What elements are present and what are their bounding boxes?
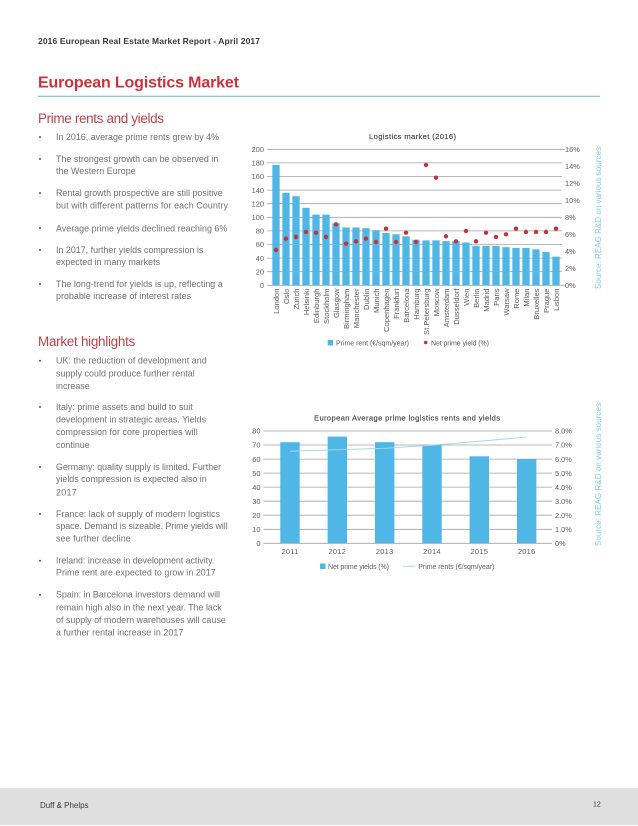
chart title: Logistics market (2016) bbox=[369, 132, 456, 141]
city labels: Madrid bbox=[482, 288, 491, 312]
city labels: Warsaw bbox=[502, 288, 511, 316]
bullet list: prime rents and yields: Average prime yields declined reaching 6% bbox=[56, 223, 227, 233]
bullet list: market highlights: of supply of modern warehouses will cause bbox=[56, 615, 226, 625]
dots: net prime yield bbox=[274, 163, 558, 252]
city labels: Dublin bbox=[362, 288, 371, 310]
right axis labels bbox=[555, 427, 572, 548]
chart legend: Prime rent (€/sqm/year) bbox=[336, 340, 409, 347]
right axis labels: 12% bbox=[565, 179, 580, 188]
city labels: Munich bbox=[372, 288, 381, 313]
bullet list: market highlights: supply could produce further rental bbox=[56, 368, 195, 378]
bullet list: market highlights: increase bbox=[56, 381, 90, 391]
left axis labels: 20 bbox=[256, 267, 264, 276]
bullet list: market highlights: space. Demand is sizeable. Prime yields will bbox=[56, 521, 228, 531]
right axis labels: 4.0% bbox=[555, 483, 572, 492]
bullet list: market highlights: compression for core properties will bbox=[56, 427, 198, 437]
bullet list: market highlights: Germany: quality supply is limited. Further bbox=[56, 462, 221, 472]
city labels: Wien bbox=[462, 288, 471, 306]
left axis labels: 30 bbox=[252, 497, 260, 506]
report header line: 2016 European Real Estate Market Report - April 2017 bbox=[38, 36, 260, 46]
source note: chart 2: Source: REAG R&D on various sources bbox=[594, 403, 603, 546]
city labels: Dusseldorf bbox=[452, 288, 461, 325]
right axis labels: 8.0% bbox=[555, 427, 572, 436]
city labels: Manchester bbox=[352, 288, 361, 328]
city labels: Oslo bbox=[282, 288, 291, 304]
year labels: 2016 bbox=[518, 547, 536, 556]
bars: net prime yields bbox=[280, 437, 536, 543]
bullet list: prime rents and yields: In 2016, average prime rents grew by 4% bbox=[56, 132, 219, 142]
city labels: Amsterdam bbox=[442, 288, 451, 327]
city labels: Edinburgh bbox=[312, 288, 321, 323]
bullet list: market highlights: Ireland: increase in development activity. bbox=[56, 556, 214, 566]
bullet list: market highlights: France: lack of supply of modern logistics bbox=[56, 509, 221, 519]
bullet list: market highlights: UK: the reduction of development and bbox=[56, 356, 207, 366]
bullet list: prime rents and yields: the Western Europe bbox=[56, 166, 136, 176]
left axis labels: 140 bbox=[252, 186, 264, 195]
chart legend bbox=[328, 340, 489, 347]
left axis labels: 100 bbox=[252, 213, 264, 222]
city labels: Zurich bbox=[292, 288, 301, 310]
left axis labels bbox=[252, 427, 260, 548]
right axis labels: 14% bbox=[565, 162, 580, 171]
chart legend: Net prime yields (%) bbox=[328, 564, 389, 571]
city labels: Prague bbox=[542, 288, 551, 313]
year labels: 2011 bbox=[281, 547, 299, 556]
bullet list: market highlights: 2017 bbox=[56, 488, 77, 498]
right axis labels bbox=[565, 145, 580, 290]
right axis labels: 6.0% bbox=[555, 455, 572, 464]
city labels: Milan bbox=[522, 288, 531, 307]
city labels: London bbox=[272, 288, 281, 314]
city labels: Bruxelles bbox=[532, 288, 541, 320]
city labels: St.Petersburg bbox=[422, 288, 431, 335]
right axis labels: 5.0% bbox=[555, 469, 572, 478]
left axis labels: 40 bbox=[252, 483, 260, 492]
city labels: Helsinki bbox=[302, 288, 311, 315]
bullet list: market highlights: yields compression is expected also in bbox=[56, 474, 207, 484]
bullet list: prime rents and yields: probable increase of interest rates bbox=[56, 291, 192, 301]
city labels: Stockholm bbox=[322, 288, 331, 324]
right axis labels: 2.0% bbox=[555, 511, 572, 520]
bullet list: prime rents and yields bbox=[39, 132, 229, 301]
line: prime rents bbox=[290, 437, 527, 451]
footer band bbox=[0, 788, 638, 825]
city labels: Berlin bbox=[472, 288, 481, 308]
left axis labels: 70 bbox=[252, 441, 260, 450]
bullet list: prime rents and yields: expected in many markets bbox=[56, 257, 161, 267]
right axis labels: 0% bbox=[555, 539, 566, 548]
left axis labels: 80 bbox=[256, 227, 264, 236]
bullet list: market highlights: remain high also in the next year. The lack bbox=[56, 603, 222, 613]
right axis labels: 1.0% bbox=[555, 525, 572, 534]
left axis labels: 200 bbox=[252, 145, 264, 154]
bullet list: market highlights: continue bbox=[56, 440, 90, 450]
chart: logistics market 2016 bbox=[252, 132, 580, 347]
year labels: 2012 bbox=[328, 547, 346, 556]
bullet list: prime rents and yields: Rental growth prospective are still positive bbox=[56, 188, 223, 198]
chart title: European Average prime logistics rents and yields bbox=[314, 414, 500, 422]
heading: market highlights: Market highlights bbox=[38, 334, 136, 349]
year labels: 2014 bbox=[423, 547, 441, 556]
city labels: Barcelona bbox=[402, 288, 411, 323]
city labels: Glasgow bbox=[332, 288, 341, 318]
bullet list: market highlights: Italy: prime assets and build to suit bbox=[56, 402, 193, 412]
bullet list: prime rents and yields: The long-trend for yields is up, reflecting a bbox=[56, 279, 223, 289]
right axis labels: 10% bbox=[565, 196, 580, 205]
bullet list: market highlights: see further decline bbox=[56, 534, 131, 544]
city labels: Birmingham bbox=[342, 288, 351, 329]
right axis labels: 3.0% bbox=[555, 497, 572, 506]
bullet list: prime rents and yields: but with different patterns for each Country bbox=[56, 201, 229, 211]
left axis labels: 50 bbox=[252, 469, 260, 478]
left axis labels: 0 bbox=[260, 281, 264, 290]
right axis labels: 0% bbox=[565, 281, 576, 290]
city labels: Paris bbox=[492, 288, 501, 306]
left axis labels bbox=[252, 145, 264, 290]
left axis labels: 0 bbox=[256, 539, 260, 548]
city labels: Moscow bbox=[432, 288, 441, 316]
heading: prime rents and yields: Prime rents and yields bbox=[38, 111, 164, 126]
city labels: Hamburg bbox=[412, 288, 421, 320]
year labels bbox=[281, 547, 536, 556]
city labels: Copenhagen bbox=[382, 288, 391, 332]
bullet list: prime rents and yields: The strongest growth can be observed in bbox=[56, 154, 218, 164]
left axis labels: 60 bbox=[256, 240, 264, 249]
bullet list: market highlights: a further rental increase in 2017 bbox=[56, 628, 183, 638]
left axis labels: 20 bbox=[252, 511, 260, 520]
city labels: Lisbon bbox=[552, 288, 561, 311]
page number: 12 bbox=[593, 802, 601, 808]
bullet list: market highlights: Spain: in Barcelona investors demand will bbox=[56, 590, 220, 600]
left axis labels: 60 bbox=[252, 455, 260, 464]
right axis labels: 6% bbox=[565, 230, 576, 239]
bullet list: prime rents and yields: In 2017, further yields compression is bbox=[56, 245, 204, 255]
bullet list: market highlights: development in strategic areas. Yields bbox=[56, 415, 207, 425]
left axis labels: 80 bbox=[252, 427, 260, 436]
year labels: 2013 bbox=[376, 547, 394, 556]
chart: european average rents and yields bbox=[252, 414, 572, 571]
footer company name: Duff & Phelps bbox=[40, 801, 88, 810]
left axis labels: 10 bbox=[252, 525, 260, 534]
source note: chart 1: Source: REAG R&D on various sources bbox=[594, 147, 603, 289]
left axis labels: 120 bbox=[252, 199, 264, 208]
city labels: Rome bbox=[512, 288, 521, 309]
right axis labels: 2% bbox=[565, 264, 576, 273]
city labels bbox=[272, 288, 561, 335]
left axis labels: 40 bbox=[256, 254, 264, 263]
left axis labels: 160 bbox=[252, 172, 264, 181]
right axis labels: 4% bbox=[565, 247, 576, 256]
bullet list: market highlights bbox=[39, 356, 228, 638]
chart legend: Prime rents (€/sqm/year) bbox=[418, 564, 494, 571]
right axis labels: 16% bbox=[565, 145, 580, 154]
page title: European Logistics Market bbox=[38, 74, 240, 92]
year labels: 2015 bbox=[470, 547, 488, 556]
city labels: Frankfurt bbox=[392, 288, 401, 319]
chart legend bbox=[320, 564, 494, 571]
chart legend: Net prime yield (%) bbox=[431, 340, 489, 347]
right axis labels: 7.0% bbox=[555, 441, 572, 450]
right axis labels: 8% bbox=[565, 213, 576, 222]
bullet list: market highlights: Prime rent are expected to grow in 2017 bbox=[56, 568, 216, 578]
left axis labels: 180 bbox=[252, 159, 264, 168]
bars: prime rent bbox=[272, 165, 560, 285]
